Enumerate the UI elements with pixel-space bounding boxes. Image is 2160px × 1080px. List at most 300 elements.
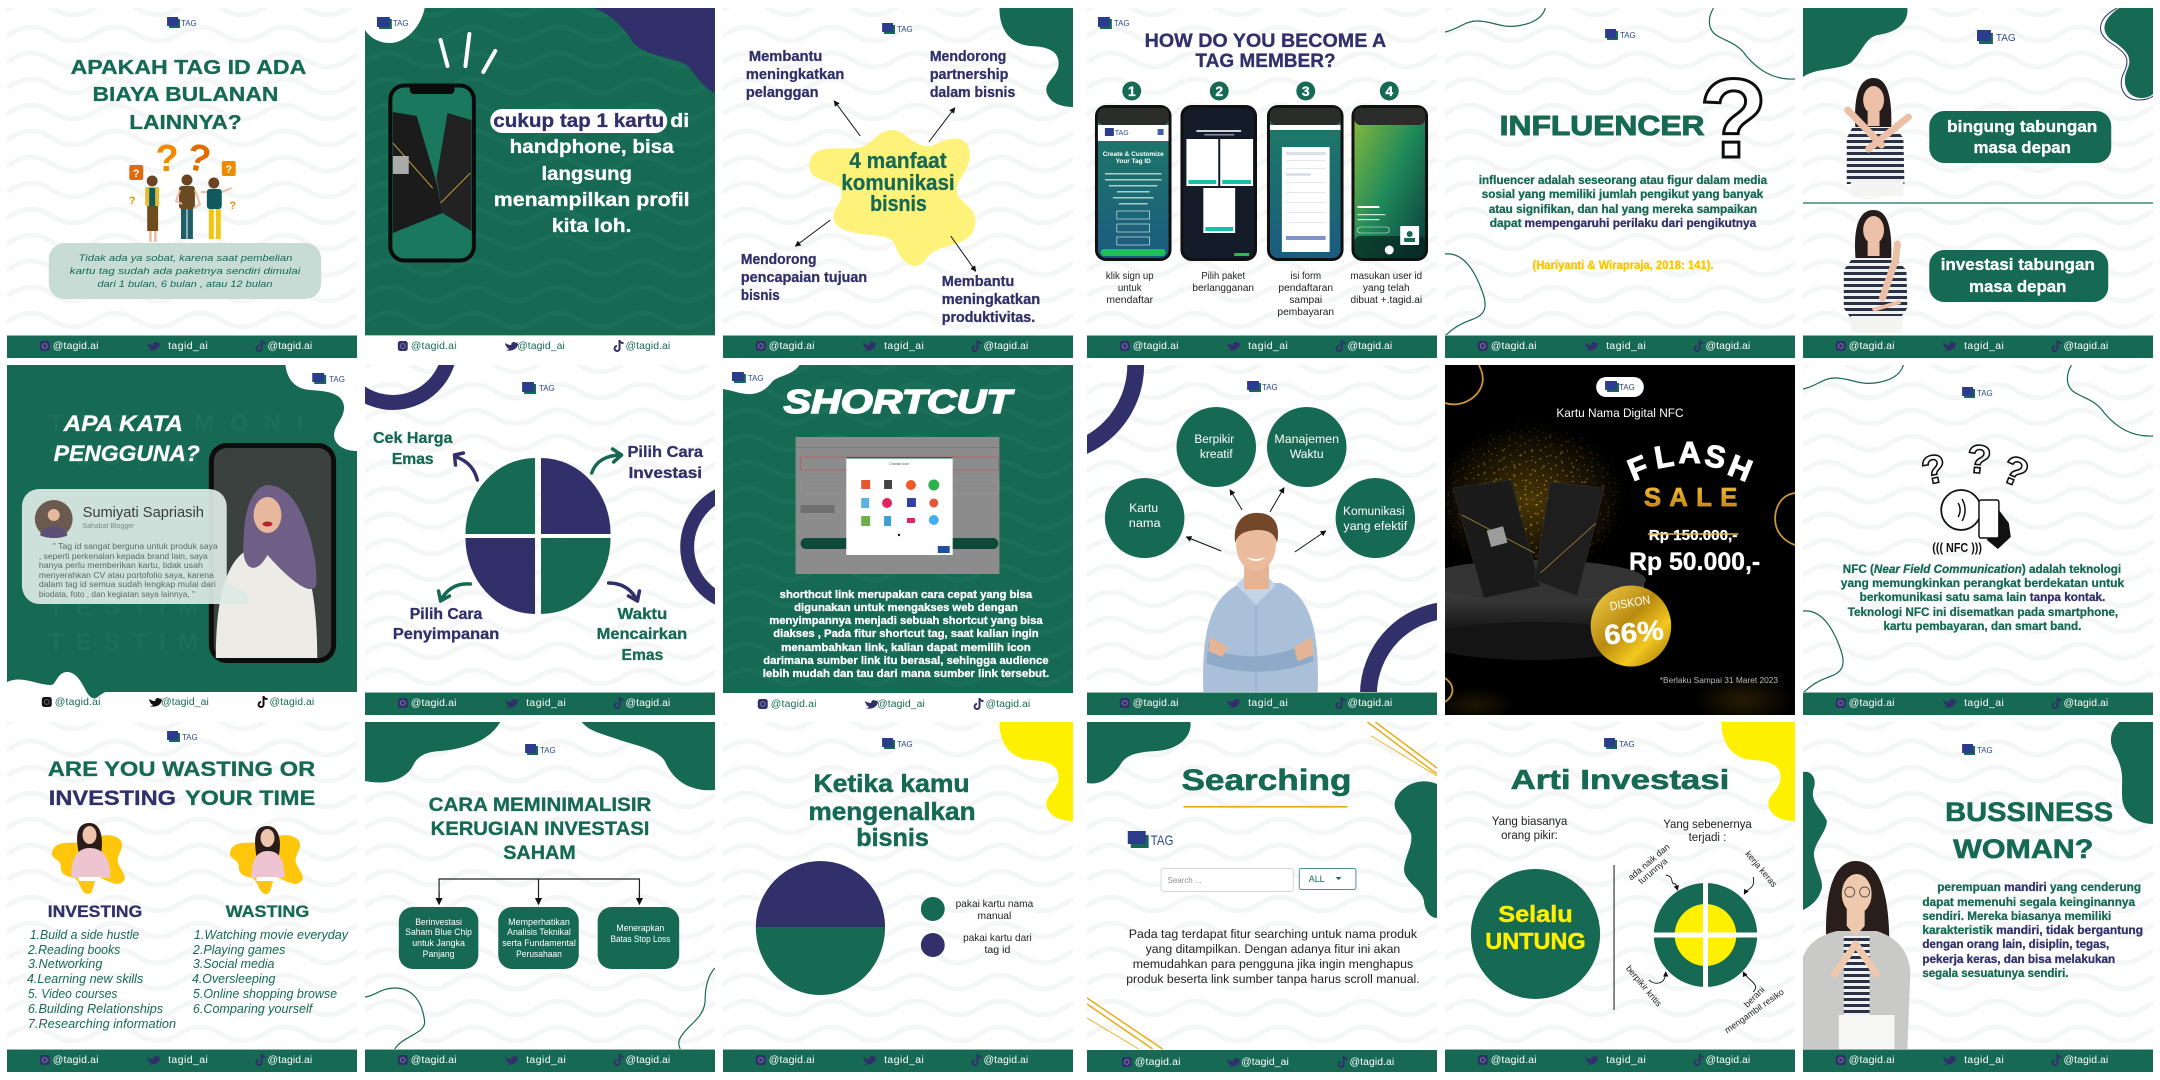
bubble: time management [1267,407,1347,487]
label: choose investment: Investasi [628,465,702,482]
logo pill: TAG [1619,383,1635,392]
body text [1126,927,1420,986]
bubble: time management: Manajemen [1274,432,1339,446]
avatar [35,500,73,538]
heading [71,57,306,134]
logo [1977,30,2016,44]
photo: wasting woman on star [230,826,303,894]
green blob top-left [1087,722,1191,784]
gold strokes [1087,722,1437,1049]
text: what people think: Yang biasanya [1492,814,1568,828]
label: choose storage [393,606,499,643]
tile: how to become member [1087,8,1437,358]
pill: invest: investasi tabungan [1941,255,2095,274]
label: when to cash out: Emas [622,647,663,664]
body text: sendiri. Mereka biasanya memiliki [1922,909,2111,923]
captions: masukan user id [1350,271,1422,282]
footer: @tagid_ai [161,697,209,708]
box: analysis: Memperhatikan [508,917,570,927]
footer [1087,335,1437,358]
heading: BUSSINESS [1945,797,2113,827]
captions: pembayaran [1277,307,1334,318]
title: Arti Investasi [1511,764,1729,795]
background [723,722,1073,1072]
rotated labels: berani [1742,985,1767,1009]
background [365,8,715,358]
body text: yang memungkinkan perangkat berdekatan untuk [1841,576,2125,590]
legend: manual card: manual [978,911,1011,922]
body text: shorthcut link merupakan cara cepat yang bisa [780,589,1033,601]
old price: Rp 150.000,- [1649,527,1737,544]
circle: always profit [1471,869,1600,999]
body text: NFC (Near Field Communication) adalah teknologi [1843,562,2121,576]
text: tap card message: cukup tap 1 kartu [493,111,664,132]
icon: question marks: ? [1965,437,1993,483]
callout: kartu tag sudah ada paketnya sendiri dimulai [70,266,302,276]
captions: yang telah [1363,283,1410,294]
footer: @tagid.ai [1706,341,1750,352]
pill: confused [1929,111,2111,163]
label: wasting: WASTING [226,902,309,921]
illustration: three confused people: ? [133,168,140,180]
body text: yang ditampilkan. Dengan adanya fitur ini akan [1146,942,1400,956]
discount badge [1591,586,1671,666]
footer: @tagid.ai [2064,698,2108,709]
text: benefit bottom-left: pencapaian tujuan [741,269,867,286]
text: what people think: orang pikir: [1501,828,1558,842]
footer [7,335,357,358]
background [723,365,1073,715]
heading: TAG MEMBER? [1195,51,1336,72]
body text: kartu pembayaran, dan smart band. [1884,619,2081,633]
list: investing [27,927,176,1031]
footer: @tagid.ai [268,341,312,352]
footer: @tagid_ai [877,699,925,710]
logo [377,17,409,29]
logo: TAG [393,19,409,28]
footer [1803,1049,2153,1072]
label: check gold price [373,430,453,468]
logo: TAG [897,25,913,34]
circle: always profit: Selalu [1498,901,1573,927]
heading [429,795,652,864]
phone 2 [1180,105,1257,261]
title: APA KATA [63,411,183,436]
text: tap card message: di [670,111,689,132]
heading [1146,33,1386,68]
footer: tagid_ai [526,698,566,709]
footer [42,696,314,708]
validity note: *Berlaku Sampai 31 Maret 2023 [1660,675,1778,685]
yellow corner blob [999,722,1073,821]
footer: @tagid.ai [1706,1055,1750,1066]
logo: TAG [539,384,555,393]
discount badge: 66% [1603,614,1665,651]
body text: segala sesuatunya sendiri. [1922,966,2068,980]
quote: hanya perlu memberikan kartu, tidak usah [39,560,203,570]
text: benefit top-right [930,50,1015,98]
quote: " Tag id sangat berguna untuk produk saya [53,541,218,551]
footer: @tagid_ai [1241,1057,1289,1068]
box: blue chip: Panjang [423,949,454,959]
bubble: business card [1105,478,1184,558]
yellow splash [809,130,975,266]
quote: dalam tag id semua sudah lengkap mulai dari [39,579,216,589]
box: stop loss [598,907,679,969]
list: wasting: 5.Online shopping browse [193,986,337,1001]
tile: introducing business [723,722,1073,1072]
footer: @tagid.ai [626,341,670,352]
body text: dengan orang lain, disiplin, tegas, [1922,937,2109,951]
captions: sampai [1289,295,1322,306]
heading: WOMAN? [1953,834,2093,864]
splash title: 4 manfaat [849,148,947,173]
text: what people think [1492,814,1568,842]
green blob top-right [582,722,715,790]
logo: TAG [1620,31,1636,40]
tile: wasting or investing [7,722,357,1072]
bubble: creative thinking: Berpikir [1194,432,1234,446]
footer: @tagid.ai [53,341,98,352]
label: check gold price: Emas [392,451,434,468]
heading: mengenalkan [809,798,976,826]
background [7,8,357,358]
gold dust [1435,405,1793,725]
new price: Rp 50.000,- [1629,548,1760,576]
target chart [1651,880,1760,990]
discount badge: DISKON [1609,593,1651,613]
half pie chart [756,861,885,995]
label: choose storage: Pilih Cara [410,606,482,623]
step numbers: 4 [1385,83,1393,99]
green corner blob right [2104,8,2153,98]
logo [525,744,556,755]
arrows [439,449,639,601]
body text: pekerja keras, dan bisa melakukan [1922,952,2115,966]
bubble: time management: Waktu [1290,447,1324,461]
footer [1445,335,1795,358]
heading: SAHAM [503,843,576,864]
list: wasting: 1.Watching movie everyday [194,927,350,942]
body text: Teknologi NFC ini disematkan pada smartphone, [1848,605,2118,619]
footer: @tagid.ai [53,1055,98,1066]
footer: @tagid.ai [1349,1057,1394,1068]
ghost testimonial text: TESTIM [49,629,198,656]
search box [1161,868,1293,892]
footer: @tagid.ai [1133,698,1178,709]
tile: flash sale [1423,365,1795,725]
box: stop loss: Batas Stop Loss [611,934,671,944]
logo: TAG [1151,832,1174,848]
bubble: effective communication: yang efektif [1344,519,1408,533]
green corner blob left [1803,8,1907,77]
splash title [842,152,954,212]
text: tap card message: langsung [541,164,632,185]
box: stop loss: Menerapkan [617,923,664,933]
step numbers: 2 [1215,83,1223,99]
body text [1922,880,2143,980]
phone with video of user [209,443,336,663]
footer [758,698,1030,710]
green blob top-right [2111,722,2153,824]
logo: TAG [748,374,764,383]
logo [882,23,913,34]
label: check gold price: Cek Harga [373,430,453,447]
logo [732,372,764,383]
list: investing: 3.Networking [28,956,103,971]
white corner blob [723,365,800,394]
heading: Ketika kamu [813,770,970,798]
quote: menyerahkan CV atau portofolio saya, karena [39,570,214,580]
footer: tagid_ai [884,341,924,352]
footer: @tagid.ai [985,699,1030,710]
green blob top-left [365,722,500,783]
text: benefit top-left: meningkatkan [746,66,844,83]
heading: YOUR TIME [185,787,315,810]
text: FLASH [1623,435,1757,489]
box: blue chip [399,907,478,969]
filter button [1299,868,1356,890]
modal: Choose Icon [889,462,909,466]
connector arrows [439,879,639,904]
text: SALE: SALE [1644,484,1737,512]
NFC cards [1453,480,1604,598]
footer: @tagid.ai [2064,341,2108,352]
tile: minimise stock loss [365,722,715,1072]
list: investing: 5. Video courses [28,986,118,1001]
body text [1479,175,1768,230]
footer: @tagid.ai [1849,341,1894,352]
footer: @tagid.ai [411,1055,456,1066]
list: investing: 4.Learning new skills [27,971,144,986]
white corner blob [285,365,357,451]
footer: @tagid.ai [411,341,456,352]
tile: testimonial [7,365,357,715]
step numbers [1122,82,1399,100]
icon: tap rays [441,34,495,72]
logo: TAG [540,746,556,755]
footer: @tagid_ai [517,341,565,352]
logo: TAG [1977,746,1993,755]
box: blue chip: Saham Blue Chip [405,927,472,937]
text: benefit top-left [746,48,844,101]
logo [522,382,555,394]
illustration: three confused people: ? [129,195,136,207]
text: benefit top-left: pelanggan [746,84,818,101]
splash title: bisnis [870,191,927,216]
list: investing: 6.Building Relationships [28,1001,164,1016]
logo [1962,387,1993,398]
tile: NFC [1803,365,2153,715]
footer [7,1049,357,1072]
background [1445,8,1795,358]
ghost testimonial text: TESTIMONI [49,410,303,437]
body text: perempuan mandiri yang cenderung [1937,880,2141,894]
text: tap card message: menampilkan profil [494,190,690,211]
tile: gold investing steps [336,288,802,715]
footer: @tagid.ai [2064,1055,2108,1066]
list: investing: 7.Researching information [28,1016,176,1031]
splash title: komunikasi [841,170,955,195]
footer: tagid_ai [1606,341,1646,352]
body text: memudahkan para pengguna jika ingin menghapus [1133,957,1413,971]
background [7,722,357,1072]
legend: tag id card: pakai kartu dari [963,933,1032,944]
illustration: three confused people: ? [229,200,236,212]
footer: @tagid.ai [769,341,814,352]
text: benefit top-right: partnership [930,66,1008,83]
footer: @tagid.ai [1849,1055,1894,1066]
footer: tagid_ai [1964,698,2004,709]
captions [1106,271,1422,318]
photo: woman crossing arms [1847,78,1908,196]
tile: four benefits [723,8,1073,358]
logo: TAG [897,740,913,749]
photo: woman pointing up [1844,210,1907,333]
title: SHORTCUT [784,383,1015,420]
footer: @tagid.ai [626,698,670,709]
phone 1: Create & Customize [1103,151,1164,158]
footer: tagid_ai [168,341,208,352]
rotated labels: mengambil resiko [1723,987,1786,1035]
captions: untuk [1118,283,1142,294]
heading: ARE YOU WASTING OR [48,758,315,781]
body text: karakteristik mandiri, tidak bergantung [1922,923,2143,937]
text: benefit bottom-right: Membantu [942,273,1014,290]
text: what happens: Yang sebenernya [1663,817,1752,831]
photo: investing woman on star [52,823,125,894]
list: wasting [192,927,350,1016]
search box: Search ... [1168,876,1202,885]
footer: tagid_ai [1964,1055,2004,1066]
title: Searching [1181,764,1351,797]
pill: confused: bingung tabungan [1947,117,2097,136]
text: tap card message: handphone, bisa [510,137,674,158]
text: benefit top-right: dalam bisnis [930,84,1015,101]
footer: @tagid.ai [269,697,314,708]
background [1087,365,1437,715]
logo: TAG [1114,19,1130,28]
box: blue chip: Berinvestasi [415,917,462,927]
footer [1803,692,2153,715]
title [54,411,200,466]
footer: tagid_ai [1964,341,2004,352]
title: PENGGUNA? [54,441,200,466]
logo [1247,381,1278,392]
background [1803,722,2153,1072]
filter button: ALL [1309,874,1325,884]
box: blue chip: untuk Jangka [412,938,465,948]
quote: , seperti perkenalan kepada brand lain, saya [39,551,208,561]
icon: question marks [1918,437,2035,497]
photo: woman with glasses [1803,861,1910,1049]
callout [49,243,321,299]
yellow corner blob [1721,722,1795,821]
text: benefit bottom-left: bisnis [741,287,780,304]
logo: TAG [1619,740,1635,749]
footer [1445,1049,1795,1072]
heading [48,758,315,810]
text: benefit bottom-left [742,252,866,300]
body text: dapat memenuhi segala keinginannya [1922,895,2135,909]
ghost testimonial text: TESTIM [49,444,198,471]
rotated labels: ada naik dan [1626,842,1672,882]
background [1803,8,2153,358]
phone with cards [390,85,474,260]
phone 3 [1267,105,1344,261]
pill: invest: masa depan [1969,277,2066,296]
logo [1605,29,1636,40]
bubble: creative thinking: kreatif [1200,447,1233,461]
tile: monthly fee question [7,8,357,358]
logo [1604,738,1635,749]
role: Sahabat Blogger [83,521,135,530]
body text: menyimpannya menjadi sebuah shortcut yang bisa [769,615,1044,627]
arrows [796,101,976,271]
quote: biodata, foto , dan kegiatan saya lainnya, " [39,589,195,599]
background [1803,365,2153,715]
background [723,8,1073,358]
box: analysis: Perusahaan [516,949,562,959]
footer: @tagid.ai [626,1055,670,1066]
rotated labels: berpikir kritis [1624,963,1664,1009]
screenshot: add shortcut dialog [796,437,999,574]
text: tap card message [490,109,690,237]
footer: @tagid.ai [268,1055,312,1066]
body text [763,589,1049,680]
navy ring bottom-right [1368,610,1537,780]
illustration: three confused people: ? [156,138,179,180]
footer: @tagid.ai [769,1055,814,1066]
list: wasting: 4.Oversleeping [192,971,276,986]
label: when to cash out: Waktu [618,606,667,623]
tile: business woman [1803,722,2153,1072]
background [1087,722,1437,1072]
footer [365,335,715,358]
four-part pie [465,458,611,614]
rotated labels: turunnya [1636,856,1669,886]
icon: NFC phone tap [1941,490,2011,549]
background [365,722,715,1072]
footer [723,335,1073,358]
illustration: three confused people [129,136,236,242]
phone 1: TAG [1115,130,1129,137]
subtitle: Kartu Nama Digital NFC [1556,406,1684,420]
body text: menambahkan link, kalian dapat memilih icon [781,642,1031,654]
footer: tagid_ai [168,1055,208,1066]
navy ring right [687,489,802,605]
icon: question marks: ? [1996,447,2035,497]
label: choose storage: Penyimpanan [393,626,499,643]
logo: TAG [181,19,197,28]
ghost testimonial text: TESTIM [49,594,198,621]
citation: (Hariyanti & Wirapraja, 2018: 141). [1532,260,1713,272]
heading [1945,797,2113,864]
phone 4 [1351,105,1428,261]
text: benefit top-right: Mendorong [930,48,1006,65]
captions: dibuat +.tagid.ai [1350,295,1422,306]
body text: Pada tag terdapat fitur searching untuk nama produk [1129,927,1417,941]
box: analysis [498,907,579,969]
bubble: creative thinking [1176,407,1256,487]
legend: tag id card [921,933,1032,957]
logo: TAG [1977,389,1993,398]
pill: invest [1929,250,2108,302]
background [1445,722,1795,1072]
bubble: business card: Kartu [1129,501,1158,515]
captions: klik sign up [1106,271,1154,282]
rotated labels: kerja keras [1743,849,1779,889]
